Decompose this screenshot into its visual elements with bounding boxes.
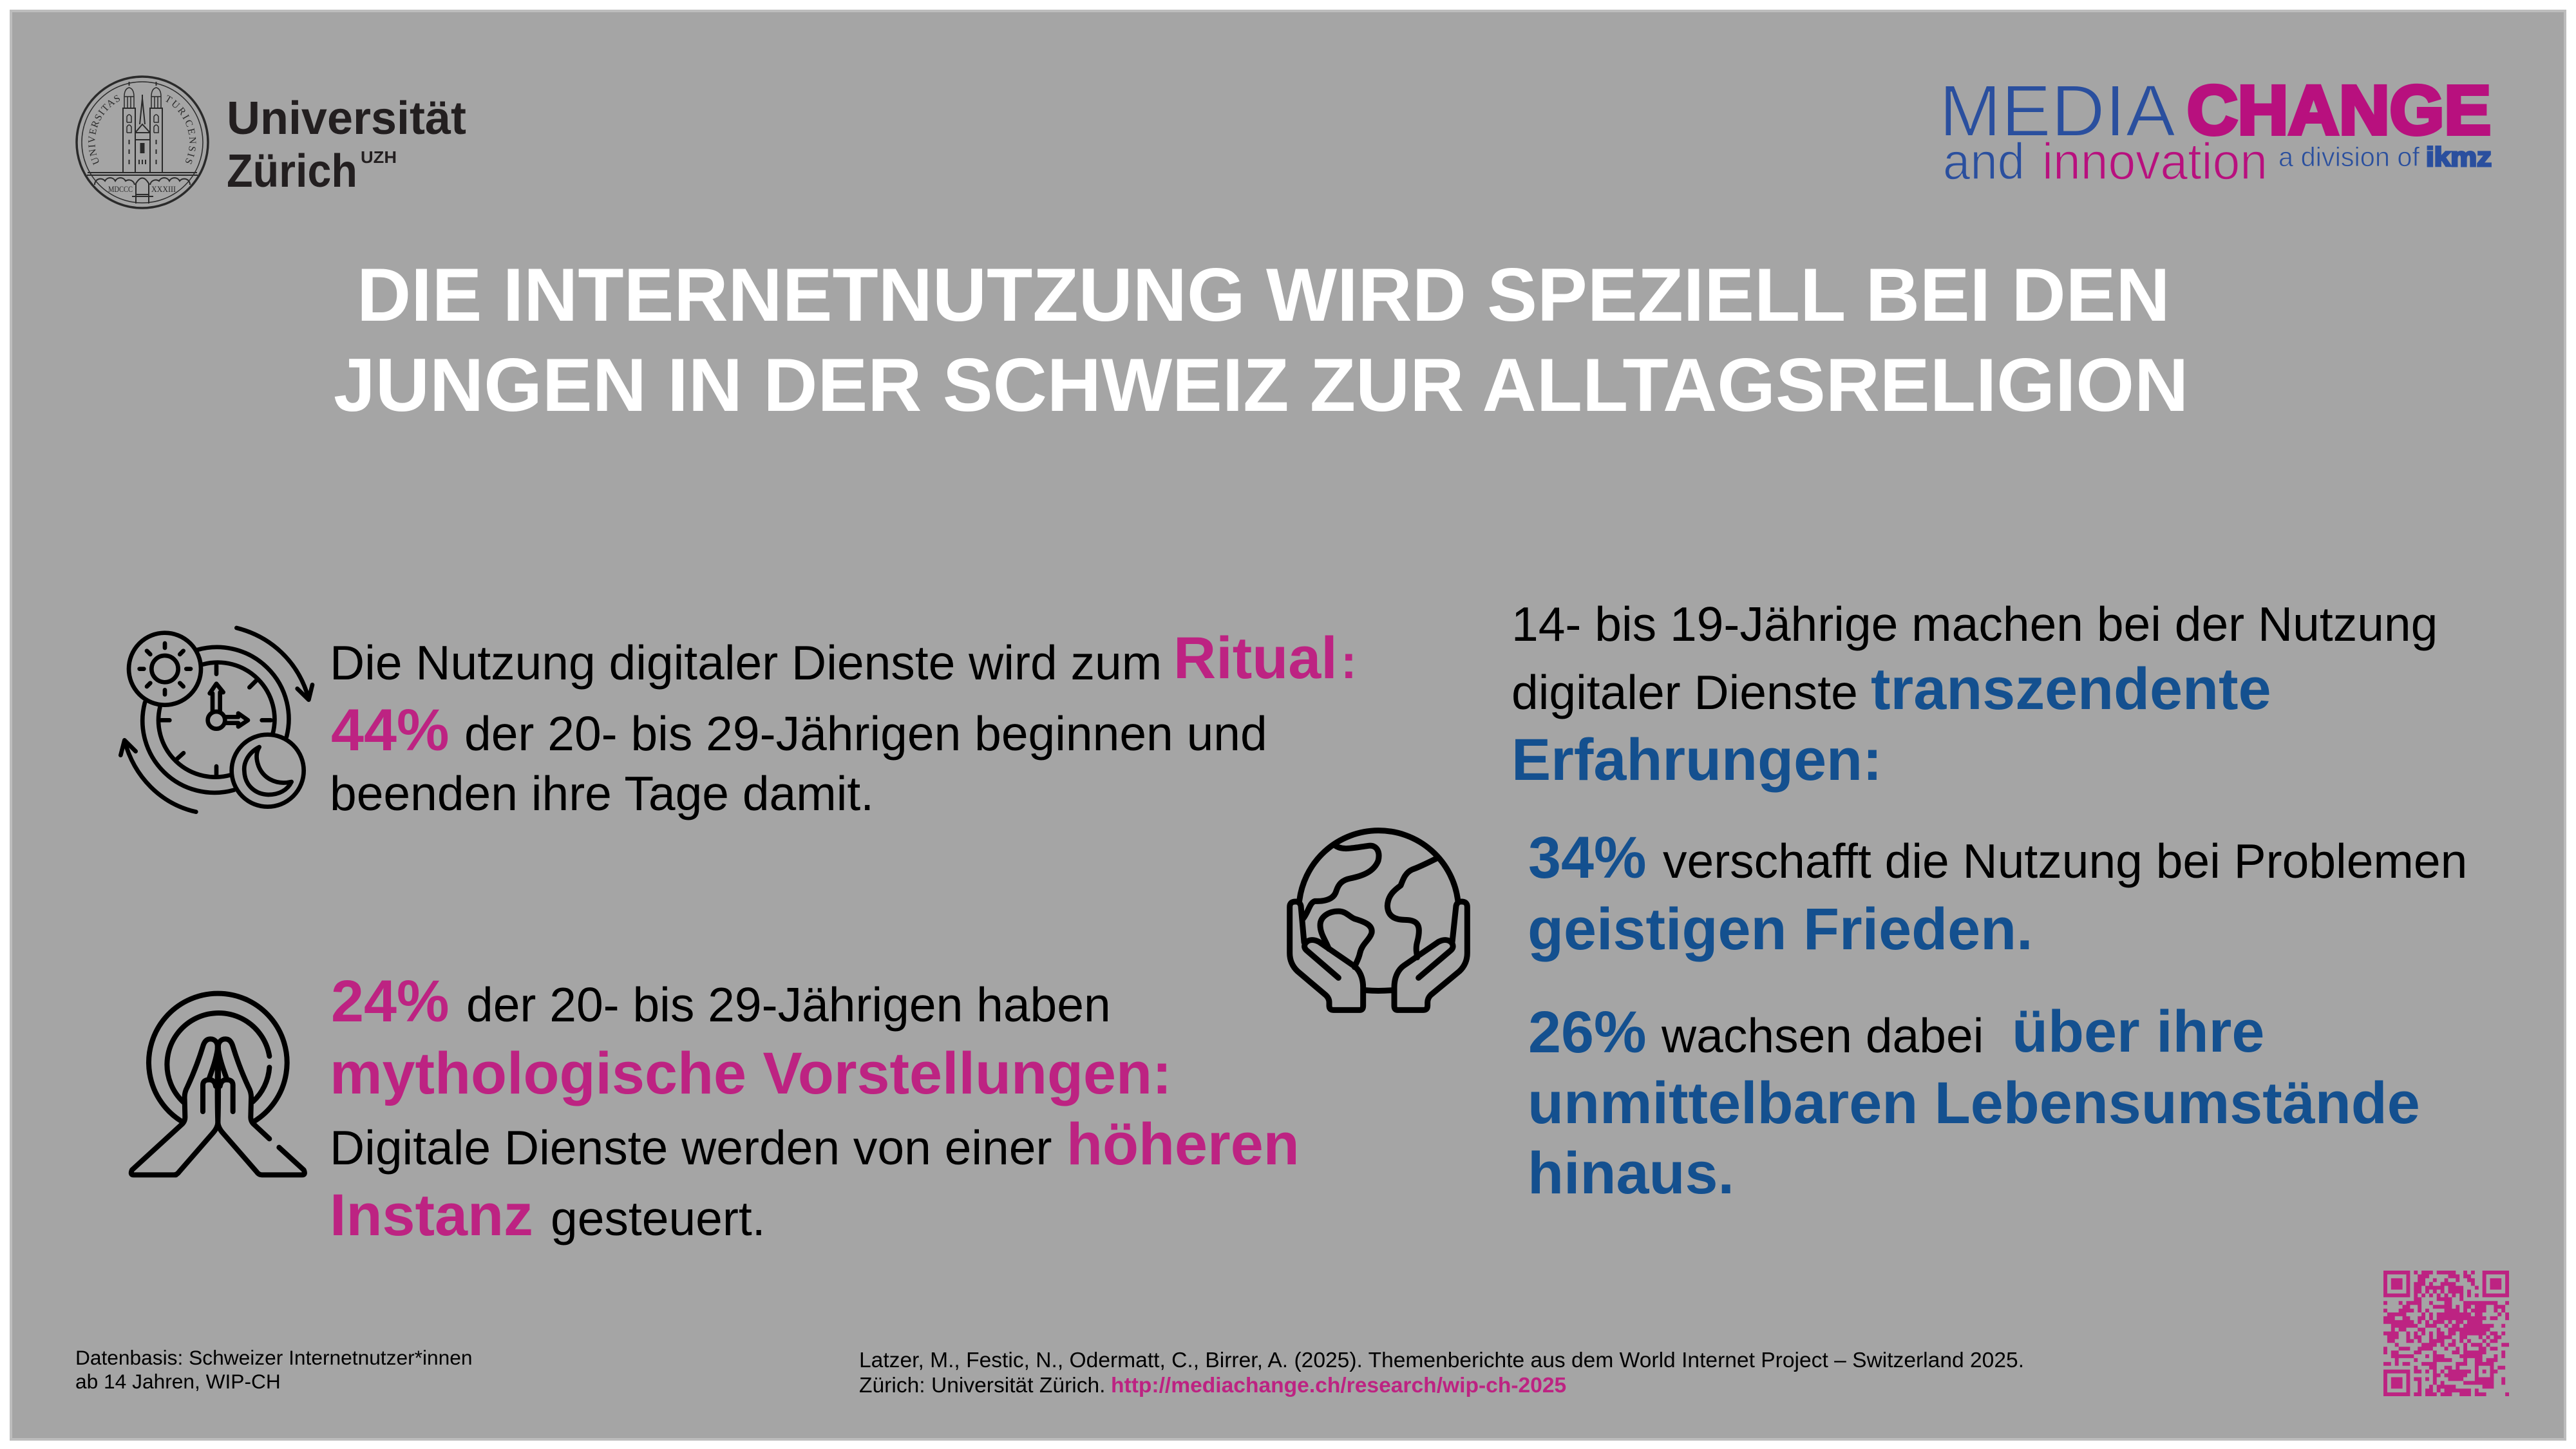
title: DIE INTERNETNUTZUNG WIRD SPEZIELL BEI DEN [357, 252, 2170, 337]
text block: transzendente Erfahrungen: digitaler Dienste [1511, 665, 1858, 719]
text block: 34% geistiger Frieden: geistigen Frieden. [1528, 896, 2033, 962]
footnote: data basis: ab 14 Jahren, WIP-CH [75, 1370, 281, 1393]
footnote: citation: Zürich: Universität Zürich. [859, 1374, 1106, 1397]
text block: 26% über Lebensumstände hinaus: 26% [1528, 999, 1647, 1065]
text block: 26% über Lebensumstände hinaus: unmittelbaren Lebensumstände [1528, 1070, 2420, 1136]
footnote: data basis: Datenbasis: Schweizer Internetnutzer*innen [75, 1346, 473, 1369]
text block: mythologische Vorstellungen: der 20- bis 29-Jährigen haben [466, 978, 1111, 1032]
text block: 34% geistiger Frieden: 34% [1528, 825, 1647, 891]
text block: transzendente Erfahrungen: transzendente [1871, 656, 2271, 722]
title [334, 252, 2188, 427]
text block: Ritual [330, 625, 1357, 820]
QR code [2383, 1273, 2509, 1394]
footnote: citation: http://mediachange.ch/research/wip-ch-2025 [1111, 1374, 1566, 1397]
logo: Universität Zürich: UNIVERSITAS [88, 95, 120, 166]
logo: Universität Zürich: XXXIII [151, 184, 176, 194]
text block: mythologische Vorstellungen: gesteuert. [551, 1191, 766, 1245]
logo: Media Change and innovation [1939, 70, 2492, 190]
icon: praying hands [131, 994, 305, 1175]
text block: 34% geistiger Frieden: verschafft die Nutzung bei Problemen [1663, 834, 2467, 888]
logo: Universität Zürich [75, 75, 466, 209]
wordmark: Universität [227, 93, 466, 144]
text block: 26% über Lebensumstände hinaus: über ihre [2012, 999, 2264, 1065]
icon: hands holding globe [1290, 831, 1467, 1010]
logo: Universität Zürich: TURICENSIS [166, 95, 196, 164]
logo: Universität Zürich: UZH [361, 147, 397, 167]
text block: transzendente Erfahrungen: 14- bis 19-Jährige machen bei der Nutzung [1511, 597, 2438, 651]
text block: mythologische Vorstellungen: 24% [331, 969, 450, 1034]
text block: mythologische Vorstellungen: Instanz [330, 1182, 533, 1248]
icon: clock with sun and moon [120, 628, 312, 812]
text block: 34% geistiger Frieden [1528, 825, 2467, 962]
seal [77, 77, 208, 208]
text block: mythologische Vorstellungen [330, 969, 1300, 1248]
title: JUNGEN IN DER SCHWEIZ ZUR ALLTAGSRELIGION [334, 343, 2188, 427]
logo: Universität Zürich: MDCCC [108, 184, 133, 194]
logo: Media Change and innovation: a division of [2278, 142, 2420, 172]
logo: Media Change and innovation: and [1943, 133, 2025, 190]
footnote: data basis [75, 1346, 473, 1393]
text block: Ritual: : [1341, 635, 1357, 688]
logo: Media Change and innovation: CHANGE [2187, 71, 2491, 149]
text block: Ritual: der 20- bis 29-Jährigen beginnen und [464, 706, 1267, 761]
text block: transzendente Erfahrungen [1511, 597, 2438, 793]
text block: Ritual: beenden ihre Tage damit. [330, 766, 874, 820]
text block: Ritual: Die Nutzung digitaler Dienste wird zum [330, 636, 1162, 690]
text block: 26% über Lebensumstände hinaus: hinaus. [1528, 1141, 1734, 1206]
text block: mythologische Vorstellungen: mythologische Vorstellungen: [330, 1041, 1172, 1106]
text block: 26% über Lebensumstände hinaus: wachsen dabei [1661, 1009, 1984, 1063]
text block: 26% über Lebensumstände hinaus [1528, 999, 2420, 1206]
logo: Media Change and innovation: ikmz [2426, 142, 2492, 172]
footnote: citation [859, 1349, 2024, 1397]
logo: Media Change and innovation: MEDIA [1939, 70, 2176, 151]
text block: Ritual: Ritual [1173, 625, 1338, 691]
text block: Ritual: 44% [331, 697, 450, 763]
text block: mythologische Vorstellungen: Digitale Dienste werden von einer [330, 1121, 1052, 1175]
footnote: citation: Latzer, M., Festic, N., Odermatt, C., Birrer, A. (2025). Themenberichte aus dem World Internet Project – Switzerland 2025. [859, 1349, 2024, 1372]
logo: Media Change and innovation: innovation [2042, 133, 2268, 190]
text block: transzendente Erfahrungen: Erfahrungen: [1511, 727, 1882, 793]
logo: Universität Zürich: Zürich [227, 146, 357, 197]
text block: mythologische Vorstellungen: höheren [1066, 1112, 1300, 1177]
